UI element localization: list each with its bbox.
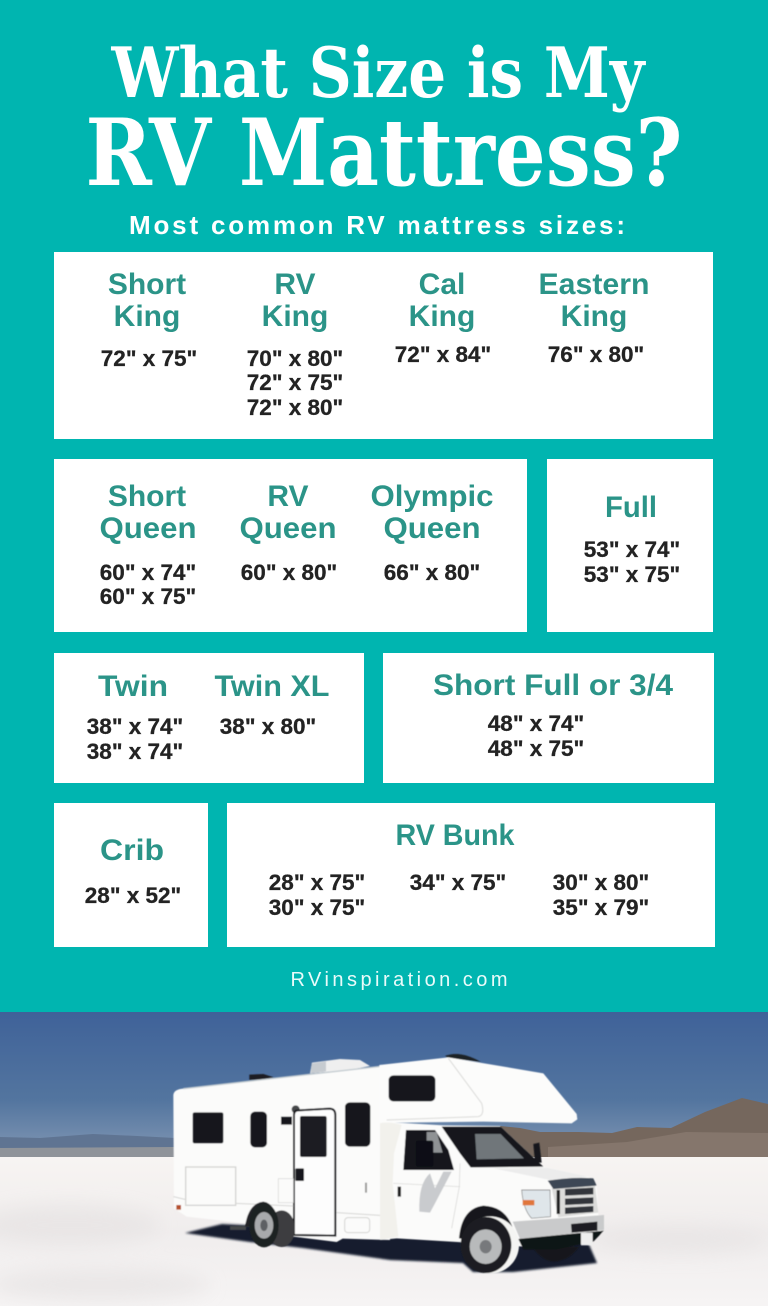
windshield (442, 1127, 543, 1167)
overcab (379, 1057, 577, 1123)
rv rear section (173, 1059, 390, 1247)
short queen: 60" x 75" (100, 584, 196, 609)
panel: short full: 48" x 75" (488, 736, 584, 761)
rv king: 72" x 75" (247, 370, 343, 395)
title (86, 33, 682, 207)
cab pillar shade (380, 1122, 402, 1240)
short queen: Queen (100, 512, 196, 545)
cab body (380, 1122, 604, 1248)
panel: full: 53" x 74" (584, 537, 680, 562)
twin: 38" x 74" (87, 714, 183, 739)
panel: rv bunk: 35" x 79" (553, 895, 649, 920)
rv king: 70" x 80" (247, 346, 343, 371)
side latch (365, 1183, 367, 1193)
olympic queen (370, 480, 494, 585)
rv king (247, 268, 343, 420)
short queen: Short (108, 480, 186, 513)
rv shadow (185, 1224, 597, 1272)
cab window (403, 1130, 454, 1170)
eastern king: Eastern (538, 268, 650, 301)
rv king: RV (274, 268, 316, 301)
roof dome (445, 1054, 481, 1062)
salt ground (0, 1157, 768, 1306)
panel: short full: 48" x 74" (488, 711, 584, 736)
twin: 38" x 74" (87, 739, 183, 764)
rv queen: 60" x 80" (241, 560, 337, 585)
front wheel (461, 1216, 519, 1274)
door reflection (419, 1172, 452, 1213)
rv queen (240, 480, 337, 585)
short king: 72" x 75" (101, 346, 197, 371)
door (294, 1109, 335, 1236)
subtitle: Most common RV mattress sizes: (129, 210, 625, 240)
panel: rv bunk: 30" x 75" (269, 895, 365, 920)
overcab window (389, 1075, 435, 1101)
panel: short full: Short Full or 3/4 (433, 669, 673, 702)
bumper (513, 1215, 604, 1249)
body trim (173, 1197, 380, 1215)
door lamp (292, 1105, 300, 1113)
door seam (393, 1163, 460, 1228)
panel: full: Full (605, 491, 657, 524)
panel: full (547, 459, 713, 632)
twin: Twin (98, 670, 168, 703)
rear dual wheel (268, 1210, 295, 1247)
eastern king: King (561, 300, 627, 333)
title: RV Mattress? (86, 98, 682, 207)
tail light (176, 1205, 181, 1210)
cal king (395, 268, 491, 367)
storage hatches (186, 1167, 370, 1233)
olympic queen: Queen (384, 512, 480, 545)
olympic queen: 66" x 80" (384, 560, 480, 585)
far wheel (533, 1247, 579, 1262)
olympic queen: Olympic (370, 480, 494, 513)
exhaust (230, 1226, 246, 1230)
website credit: RVinspiration.com (290, 969, 508, 991)
short queen: 60" x 74" (100, 560, 196, 585)
wheel arch (459, 1206, 513, 1245)
rv queen: RV (267, 480, 309, 513)
rv front section (379, 1054, 604, 1274)
rv king: King (262, 300, 328, 333)
twin (87, 670, 183, 764)
twin xl: Twin XL (214, 670, 330, 703)
cal king: King (409, 300, 475, 333)
panel: rv bunk: 34" x 75" (410, 870, 506, 895)
twin xl: 38" x 80" (220, 714, 316, 739)
cal king: 72" x 84" (395, 342, 491, 367)
ground haze (0, 1205, 768, 1301)
eastern king: 76" x 80" (548, 342, 644, 367)
grille (548, 1178, 598, 1217)
hood highlight (493, 1168, 588, 1180)
rear wheel (249, 1203, 279, 1247)
wheel arch (245, 1202, 279, 1230)
rv illustration (173, 1054, 604, 1274)
rv queen: Queen (240, 512, 336, 545)
panel: full: 53" x 75" (584, 562, 680, 587)
mountains (0, 1098, 768, 1159)
short king: King (114, 300, 180, 333)
twin xl (214, 670, 330, 739)
panel: rv bunk: 30" x 80" (553, 870, 649, 895)
side windows (193, 1102, 370, 1147)
sky (0, 1012, 768, 1159)
panel: crib (54, 803, 208, 947)
panel: short full (383, 653, 714, 783)
panel: rv bunk: RV Bunk (396, 819, 515, 852)
side mirror (533, 1143, 542, 1163)
panel: rv bunk (227, 803, 715, 947)
roof vents (249, 1059, 370, 1080)
title: What Size is My (111, 33, 646, 114)
cal king: Cal (419, 268, 465, 301)
living box (173, 1065, 390, 1242)
panel: king sizes (54, 252, 713, 439)
panel: crib: Crib (100, 834, 164, 867)
eastern king (538, 268, 650, 367)
photo: RV on salt flats (0, 1012, 768, 1306)
headlight (522, 1190, 551, 1218)
rv king: 72" x 80" (247, 395, 343, 420)
door handle (398, 1187, 401, 1197)
short king (101, 268, 197, 371)
panel: rv bunk: 28" x 75" (269, 870, 365, 895)
short king: Short (108, 268, 186, 301)
panel: queen sizes (54, 459, 527, 632)
panel: twin sizes (54, 653, 364, 783)
short queen (100, 480, 196, 609)
panel: crib: 28" x 52" (85, 883, 181, 908)
